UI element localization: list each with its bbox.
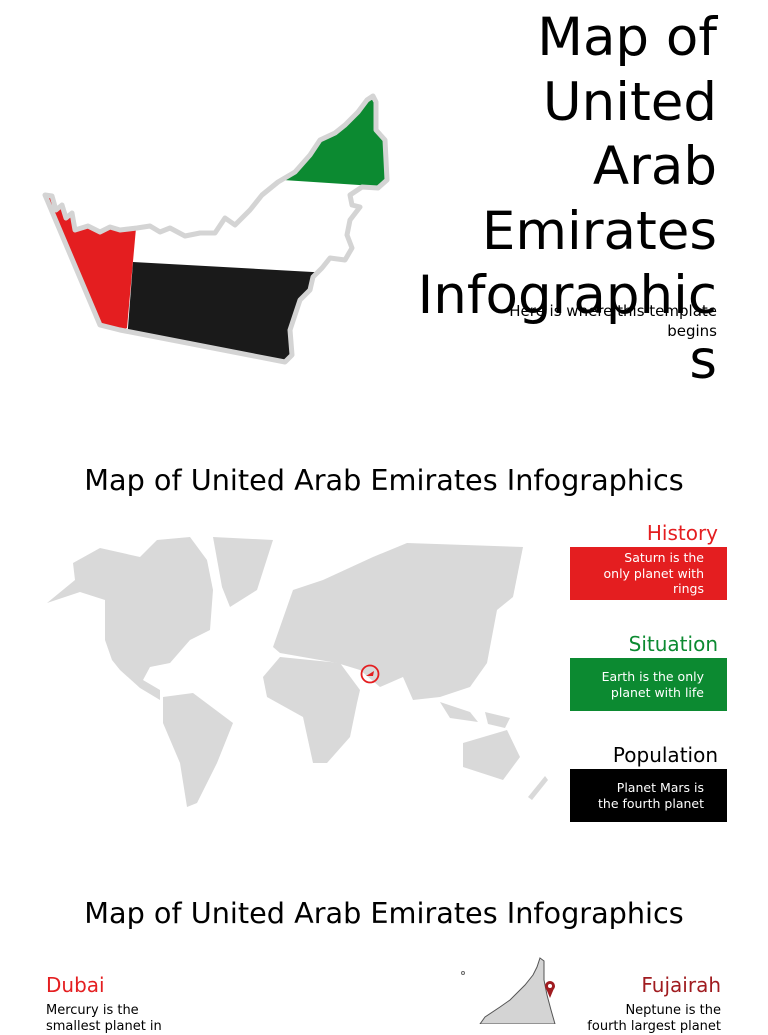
label: history: History	[647, 521, 718, 545]
box: history	[570, 547, 727, 600]
title: Map of	[537, 7, 717, 68]
title: Infographic	[418, 265, 717, 326]
dubai	[46, 973, 162, 1034]
box: situation: Earth is the only planet with life	[602, 669, 704, 700]
box: population: Planet Mars is the fourth planet	[598, 780, 704, 810]
section heading 2: Map of United Arab Emirates Infographics	[84, 896, 684, 930]
dubai: Mercury is the smallest planet in	[46, 1003, 162, 1034]
label: population: Population	[613, 743, 718, 767]
fujairah: Neptune is the	[625, 1003, 721, 1018]
title: s	[689, 330, 717, 390]
label: situation: Situation	[629, 632, 718, 656]
fujairah: fourth largest planet	[587, 1019, 721, 1034]
section heading 1: Map of United Arab Emirates Infographics	[84, 463, 684, 497]
box: situation	[570, 658, 727, 711]
title: United	[543, 72, 717, 132]
fujairah	[587, 973, 721, 1034]
marker	[362, 666, 378, 682]
world map	[47, 537, 548, 807]
uae flag map	[42, 94, 390, 364]
title: Emirates	[482, 200, 717, 262]
box: history: Saturn is the only planet with rings	[604, 550, 704, 596]
fujairah: Fujairah	[641, 973, 721, 997]
title: Arab	[593, 136, 717, 197]
box: population	[570, 769, 727, 822]
title	[418, 7, 718, 390]
dubai: Dubai	[46, 973, 105, 997]
subtitle: Here is where this template begins	[509, 302, 717, 340]
small uae map	[461, 957, 556, 1024]
